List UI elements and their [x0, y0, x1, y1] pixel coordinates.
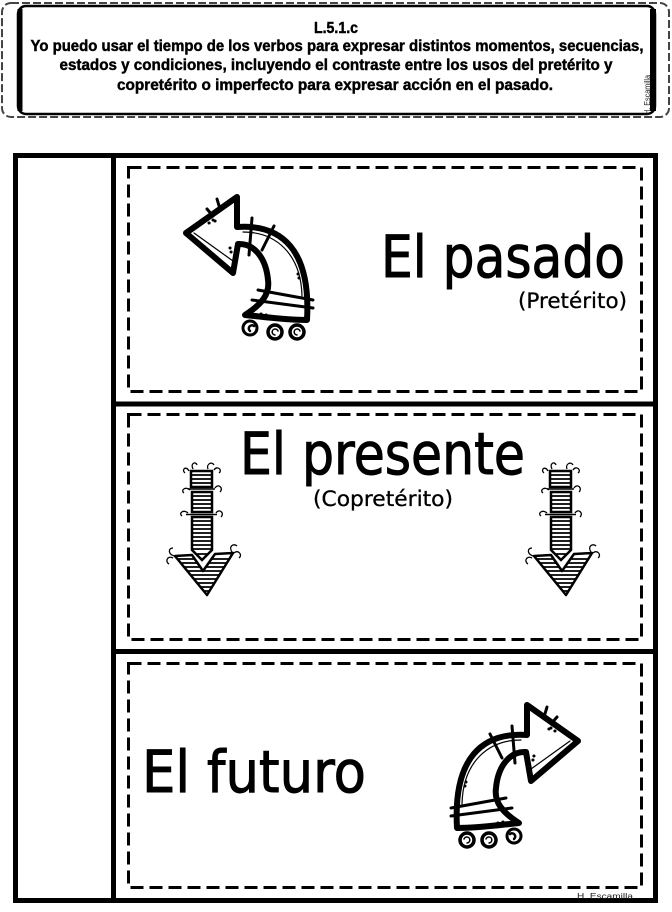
- icon: curved arrow pointing right: [451, 705, 578, 847]
- text block: objective: Yo puedo usar el tiempo de los verbos para expresar distintos momentos, secuencias,: [30, 38, 644, 55]
- text block: objective: estados y condiciones, incluyendo el contraste entre los usos del pretérito y: [60, 57, 613, 74]
- credit: bottom: H. Escamilla: [577, 892, 634, 901]
- icon: curved arrow pointing left: [186, 197, 313, 339]
- panel: el pasado: [128, 168, 642, 392]
- credit: vertical: H. Escamilla: [643, 75, 652, 115]
- panel: foldable frame: [16, 155, 656, 900]
- heading: standard code: L.5.1.c: [314, 20, 358, 37]
- panel: el futuro: [128, 664, 642, 888]
- icon: striped down arrow left: [167, 463, 240, 595]
- text block: objective: [30, 38, 644, 94]
- subtitle: pretérito: (Pretérito): [518, 289, 627, 313]
- panel: el presente: [128, 414, 642, 640]
- title: el pasado: El pasado: [381, 223, 625, 291]
- icon: striped down arrow right: [526, 463, 599, 595]
- subtitle: copretérito: (Copretérito): [313, 487, 453, 511]
- panel: learning objective header: [2, 3, 669, 117]
- title: el presente: El presente: [240, 420, 525, 488]
- title: el futuro: El futuro: [142, 738, 366, 806]
- text block: objective: copretérito o imperfecto para expresar acción en el pasado.: [117, 77, 553, 94]
